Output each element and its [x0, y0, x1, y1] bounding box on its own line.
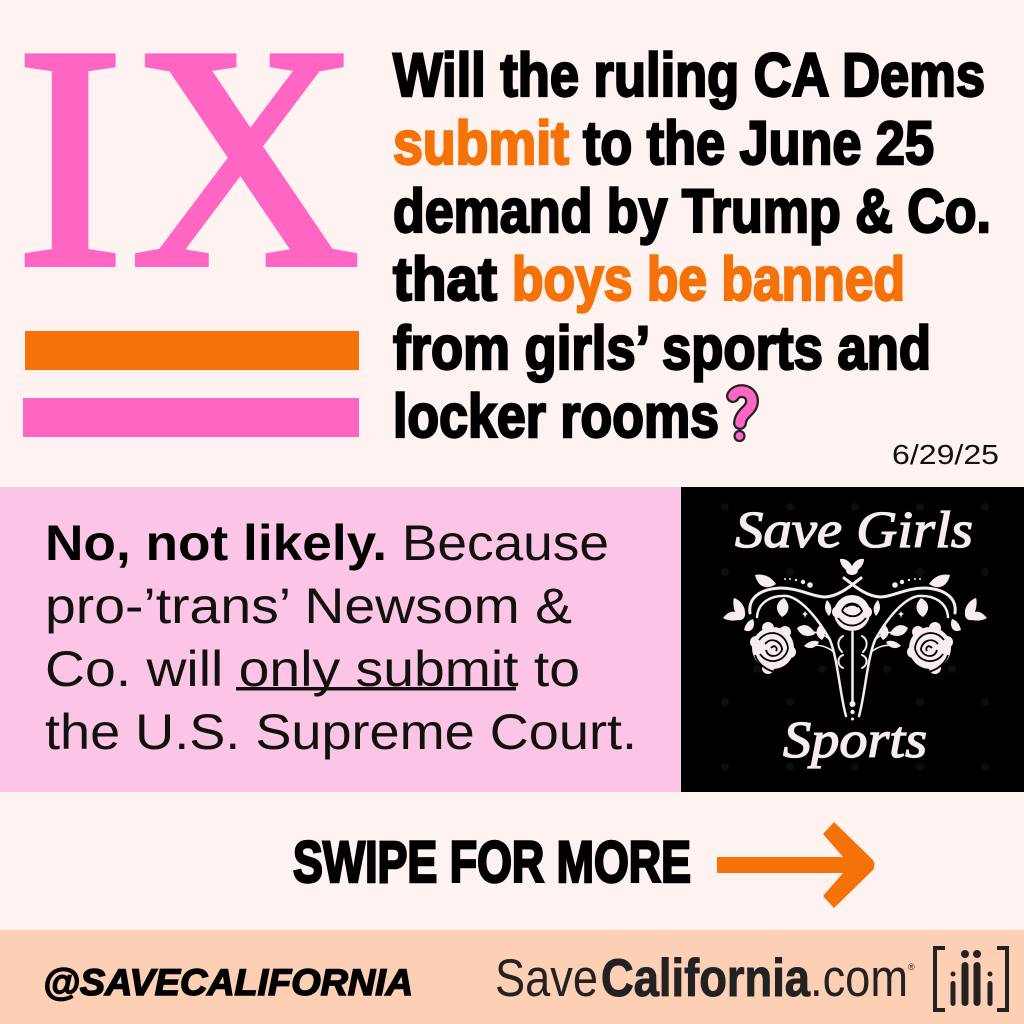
headline question: that	[393, 245, 497, 313]
website wordmark	[495, 949, 915, 1008]
headline question	[393, 41, 991, 450]
panel: answer: the U.S. Supreme Court.	[45, 704, 637, 760]
headline question: submit	[393, 109, 569, 177]
arrow	[717, 822, 874, 908]
panel: answer	[0, 487, 681, 792]
swipe prompt: SWIPE FOR MORE	[293, 830, 691, 895]
Title IX logo	[16, 0, 360, 437]
headline question: boys be banned	[512, 245, 905, 313]
website wordmark: ®	[908, 962, 915, 972]
panel: Save Girls Sports image: Sports	[783, 712, 927, 769]
icon: uterus with roses	[723, 559, 987, 720]
butterfly left	[723, 598, 745, 621]
headline question: from girls’ sports and	[393, 314, 931, 382]
butterfly top	[840, 559, 864, 575]
panel: Save Girls Sports image	[681, 487, 1024, 792]
panel: Save Girls Sports image: Save Girls	[735, 502, 973, 559]
logo: bracketed figures	[935, 948, 1007, 1010]
date: 6/29/25	[892, 439, 999, 470]
headline question: locker rooms	[393, 382, 719, 450]
social handle: @SAVECALIFORNIA	[43, 962, 413, 1003]
website wordmark: California	[601, 949, 810, 1008]
panel: answer: pro-’trans’ Newsom &	[45, 578, 572, 634]
footer band	[0, 930, 1024, 1024]
website wordmark: .com	[810, 949, 908, 1008]
leaves and butterflies	[723, 559, 987, 720]
butterfly right	[965, 598, 987, 621]
panel: answer: Co. will only submit to	[45, 641, 580, 697]
website wordmark: Save	[495, 949, 598, 1008]
panel: answer: No, not likely. Because	[45, 515, 609, 571]
headline question: to the June 25	[583, 109, 934, 177]
icon: pink question mark	[733, 391, 752, 441]
roses	[750, 595, 953, 674]
